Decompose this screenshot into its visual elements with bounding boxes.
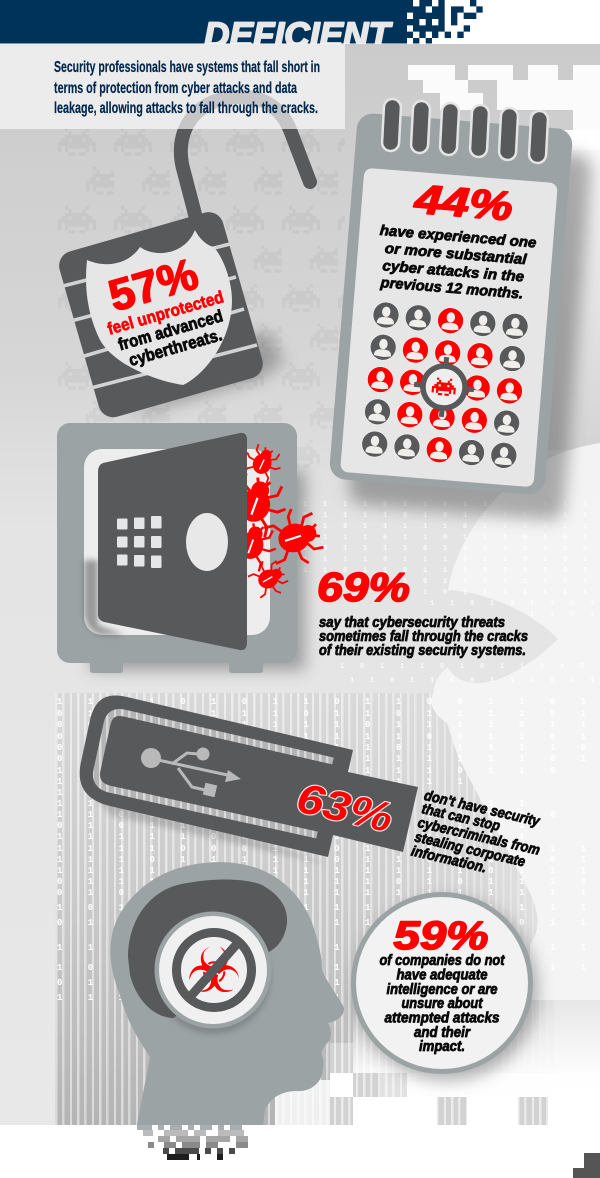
notebook shadow: [348, 138, 592, 521]
intro text: leakage, allowing attacks to fall through the cracks.: [54, 100, 318, 117]
light swoosh shape: [434, 443, 600, 693]
padlock body: [56, 209, 266, 421]
safe interior: [84, 449, 270, 635]
panel: head 59%: [110, 862, 344, 1125]
interior shadow: [84, 560, 125, 635]
head dark brain area: [128, 879, 287, 1018]
white mosaic lower right: [275, 1013, 600, 1125]
panel: safe with bugs: [57, 423, 327, 673]
door keypad: [117, 516, 162, 568]
pixel dissolve under head: [137, 1125, 248, 1160]
intro text: terms of protection from cyber attacks and data: [54, 80, 297, 97]
usb body: [80, 696, 418, 857]
safe body: [57, 423, 297, 663]
callout: 59% circle: attempted attacks: [384, 1010, 500, 1026]
usb slot: [96, 712, 333, 835]
44% stat text: cyber attacks in the: [382, 258, 525, 286]
callout: 59% circle: intelligence or are: [386, 982, 498, 998]
icon: target with invader: [411, 354, 477, 420]
padlock shadow: [120, 330, 285, 420]
57% stat text: [93, 244, 236, 373]
head silhouette: [110, 862, 344, 1125]
notebook cover: [329, 112, 573, 495]
header pixel mosaic: [407, 0, 483, 44]
header band: [0, 0, 483, 44]
44% stat text: 44%: [412, 176, 515, 229]
usb shadow: [85, 780, 330, 865]
text block: 63% caption: cybercriminals from: [416, 815, 542, 859]
intro text: Security professionals have systems that fall short in: [54, 59, 320, 76]
binary digits lower field: 0 1 1 0 0 1 1 1 1 1 0 1 1 1: [57, 978, 473, 988]
stat block: 69%: say that cybersecurity threats: [319, 615, 505, 631]
binary digits upper field: [303, 501, 600, 685]
binary digits lower field: 1 1 1 1 1 0 1 0 1 1 1 1 1 0 1 1 0: [57, 766, 565, 776]
callout: 59% circle: of companies do not: [380, 953, 506, 969]
pixel mosaic top right: [408, 65, 600, 130]
callout: 59% circle: and their: [414, 1025, 471, 1041]
binary digits lower field: 1 1 1 1 1 1 1 1 1 1 1 1 1 0 1 1: [57, 799, 534, 809]
icon: bugs: [217, 441, 327, 603]
intro text: [54, 59, 320, 117]
intro panel: [0, 44, 345, 129]
text block: 63% caption: information.: [409, 844, 488, 876]
door lock dial: [186, 513, 228, 571]
stripe squares lower right: [330, 1043, 548, 1125]
text block: 63% caption: that can stop: [420, 801, 502, 835]
stat block: 69%: 69%: [317, 564, 410, 610]
header title: DEFICIENT: [204, 16, 393, 55]
padlock stripes: [63, 244, 257, 388]
callout: 59% circle: [351, 892, 538, 1081]
safe shadow: [90, 470, 305, 670]
safe feet: [90, 660, 263, 673]
people grid: [361, 301, 529, 469]
icon: usb symbol: [141, 748, 241, 797]
text block: 63% caption: [409, 788, 542, 876]
44% stat text: or more substantial: [384, 241, 528, 268]
57% stat text: feel unprotected: [105, 287, 226, 339]
no-biohazard badge: [154, 912, 272, 1034]
text block: 63% caption: don't have security: [422, 788, 542, 830]
63% stat: 63%: [292, 774, 397, 841]
binary digits lower field: 1 1 1 1 1 0 0 1 0 1 1 1 1 1 1 1: [57, 832, 534, 842]
binary stripes band: [55, 693, 555, 1125]
safe door: [98, 433, 247, 650]
notebook page: [340, 168, 558, 487]
icon: open padlock shackle: [181, 97, 310, 222]
space invader pattern: [58, 128, 345, 473]
stat block: 69%: [317, 564, 528, 659]
binary digits lower field: 1 1 1 1 0 1 1 1 1 1 0 1 1 1: [57, 777, 473, 787]
icon: biohazard: ☣: [186, 934, 242, 1007]
pixel corner bottom right: [573, 1153, 600, 1178]
57% stat text: cyberthreats.: [127, 325, 224, 370]
shield: [86, 230, 232, 385]
binary digits lower field: 1 1 1 0 1 1 0 1 1 1 0 1: [57, 993, 411, 1003]
stat block: 69%: of their existing security systems.: [319, 643, 526, 659]
panel: USB drive 63%: [80, 696, 418, 865]
binary digits lower field: 0 1 0 1 1 1 0 1 0 1 1 1 1 1 1 1: [57, 821, 534, 831]
44% stat text: previous 12 months.: [379, 275, 524, 303]
59% stat text: 59%: [394, 914, 488, 958]
callout: 59% circle: have adequate: [396, 968, 488, 984]
text block: 63% caption: stealing corporate: [413, 829, 527, 870]
44% stat text: have experienced one: [379, 223, 537, 251]
panel: padlock 57%: [56, 209, 285, 421]
callout: 59% circle: unsure about: [402, 996, 484, 1012]
stat block: 69%: sometimes fall through the cracks: [319, 629, 528, 645]
notebook rings: [382, 99, 548, 163]
light swoosh over stripes: [432, 693, 542, 998]
callout: 59% circle: impact.: [419, 1039, 465, 1055]
57% stat text: 57%: [103, 249, 203, 321]
panel: notebook 44%: [329, 99, 592, 521]
57% stat text: from advanced: [116, 306, 225, 354]
binary digits lower field: 1 1 0 1 1 1 0 1 0 1 1 1 1 0 1 1 0: [57, 810, 565, 820]
44% stat text: [375, 173, 541, 303]
binary digits lower field: [57, 697, 600, 1003]
binary digits lower field: 1 1 0 1 0 1 1 0 1 1 1: [57, 788, 380, 798]
